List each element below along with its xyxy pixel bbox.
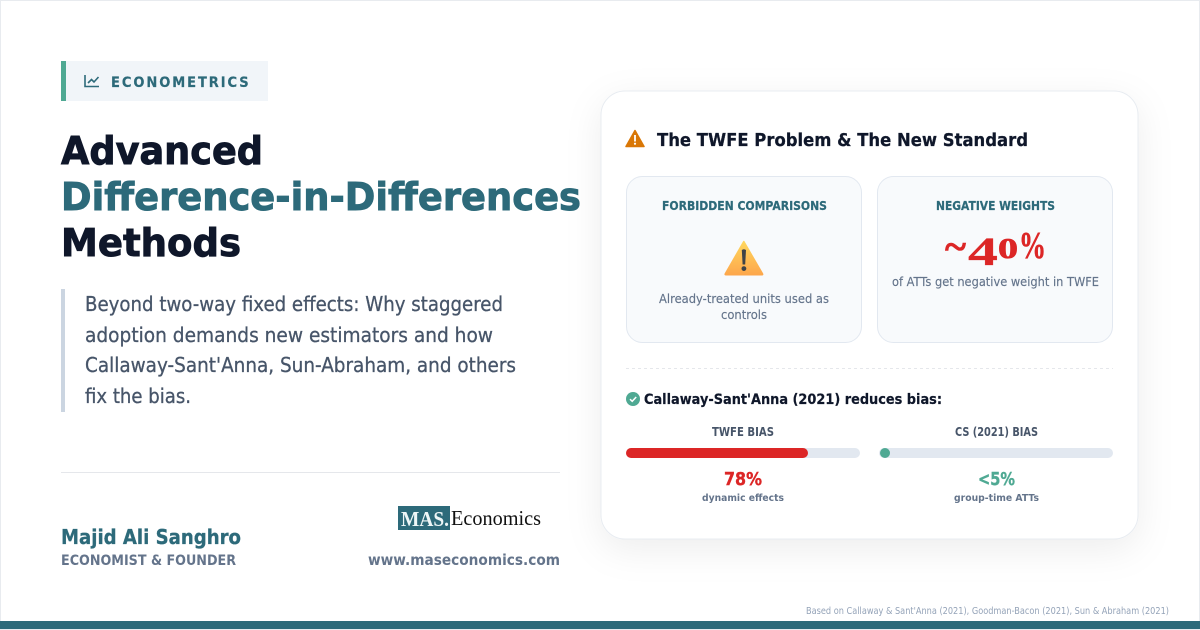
subtitle: [61, 289, 516, 412]
chart: CS 2021 bias: group-time ATTs: [954, 493, 1039, 504]
comparison heading: Callaway-Sant'Anna (2021) reduces bias:: [644, 392, 942, 408]
category badge: [61, 61, 268, 101]
card heading: The TWFE Problem & The New Standard: [657, 130, 1028, 151]
subtitle: fix the bias.: [85, 384, 191, 408]
chart: CS 2021 bias: CS (2021) BIAS: [955, 425, 1038, 439]
subtitle: Beyond two-way fixed effects: Why staggered: [85, 292, 503, 316]
icon: warning emoji: [725, 242, 763, 275]
chart: CS 2021 bias: [879, 425, 1113, 504]
panel: forbidden comparisons: FORBIDDEN COMPARISONS: [662, 199, 827, 213]
chart: TWFE bias: 78%: [724, 469, 762, 490]
panel: negative weights: NEGATIVE WEIGHTS: [936, 199, 1055, 213]
stat: about 40 percent: %: [1019, 225, 1046, 267]
panel: forbidden comparisons: Already-treated units used as: [659, 292, 829, 306]
panel: TWFE problem card: [601, 91, 1138, 539]
title: Advanced: [61, 129, 263, 173]
icon: check circle: [626, 392, 640, 406]
chart: CS 2021 bias: <5%: [978, 469, 1015, 490]
panel: forbidden comparisons: controls: [721, 308, 767, 322]
logo: MAS.Economics: Economics: [451, 506, 541, 530]
icon: line chart: [85, 75, 99, 86]
logo: MAS.Economics: [398, 506, 541, 531]
stat: about 40 percent: 4: [968, 229, 998, 274]
subtitle: Callaway-Sant'Anna, Sun-Abraham, and others: [85, 353, 516, 377]
stat: about 40 percent: [945, 224, 1046, 274]
chart: TWFE bias: TWFE BIAS: [712, 425, 774, 439]
chart: TWFE bias: [626, 425, 860, 504]
footer bar: [0, 621, 1200, 629]
panel: negative weights: of ATTs get negative weight in TWFE: [892, 275, 1099, 289]
chart: TWFE bias: dynamic effects: [702, 493, 784, 504]
title: Methods: [61, 221, 241, 265]
author: [61, 525, 241, 569]
author: ECONOMIST & FOUNDER: [61, 553, 236, 569]
author: Majid Ali Sanghro: [61, 525, 241, 549]
title: [61, 129, 581, 265]
panel: negative weights: [878, 176, 1112, 342]
panel: forbidden comparisons: [626, 176, 862, 342]
category badge: ECONOMETRICS: [111, 74, 249, 91]
title: Difference-in-Differences: [61, 175, 581, 219]
stat: about 40 percent: ~: [945, 224, 966, 269]
icon: warning triangle: [626, 130, 644, 146]
subtitle: adoption demands new estimators and how: [85, 323, 493, 347]
stat: about 40 percent: 0: [998, 234, 1018, 265]
website: www.maseconomics.com: [368, 551, 560, 569]
logo: MAS.Economics: MAS.: [401, 507, 449, 531]
